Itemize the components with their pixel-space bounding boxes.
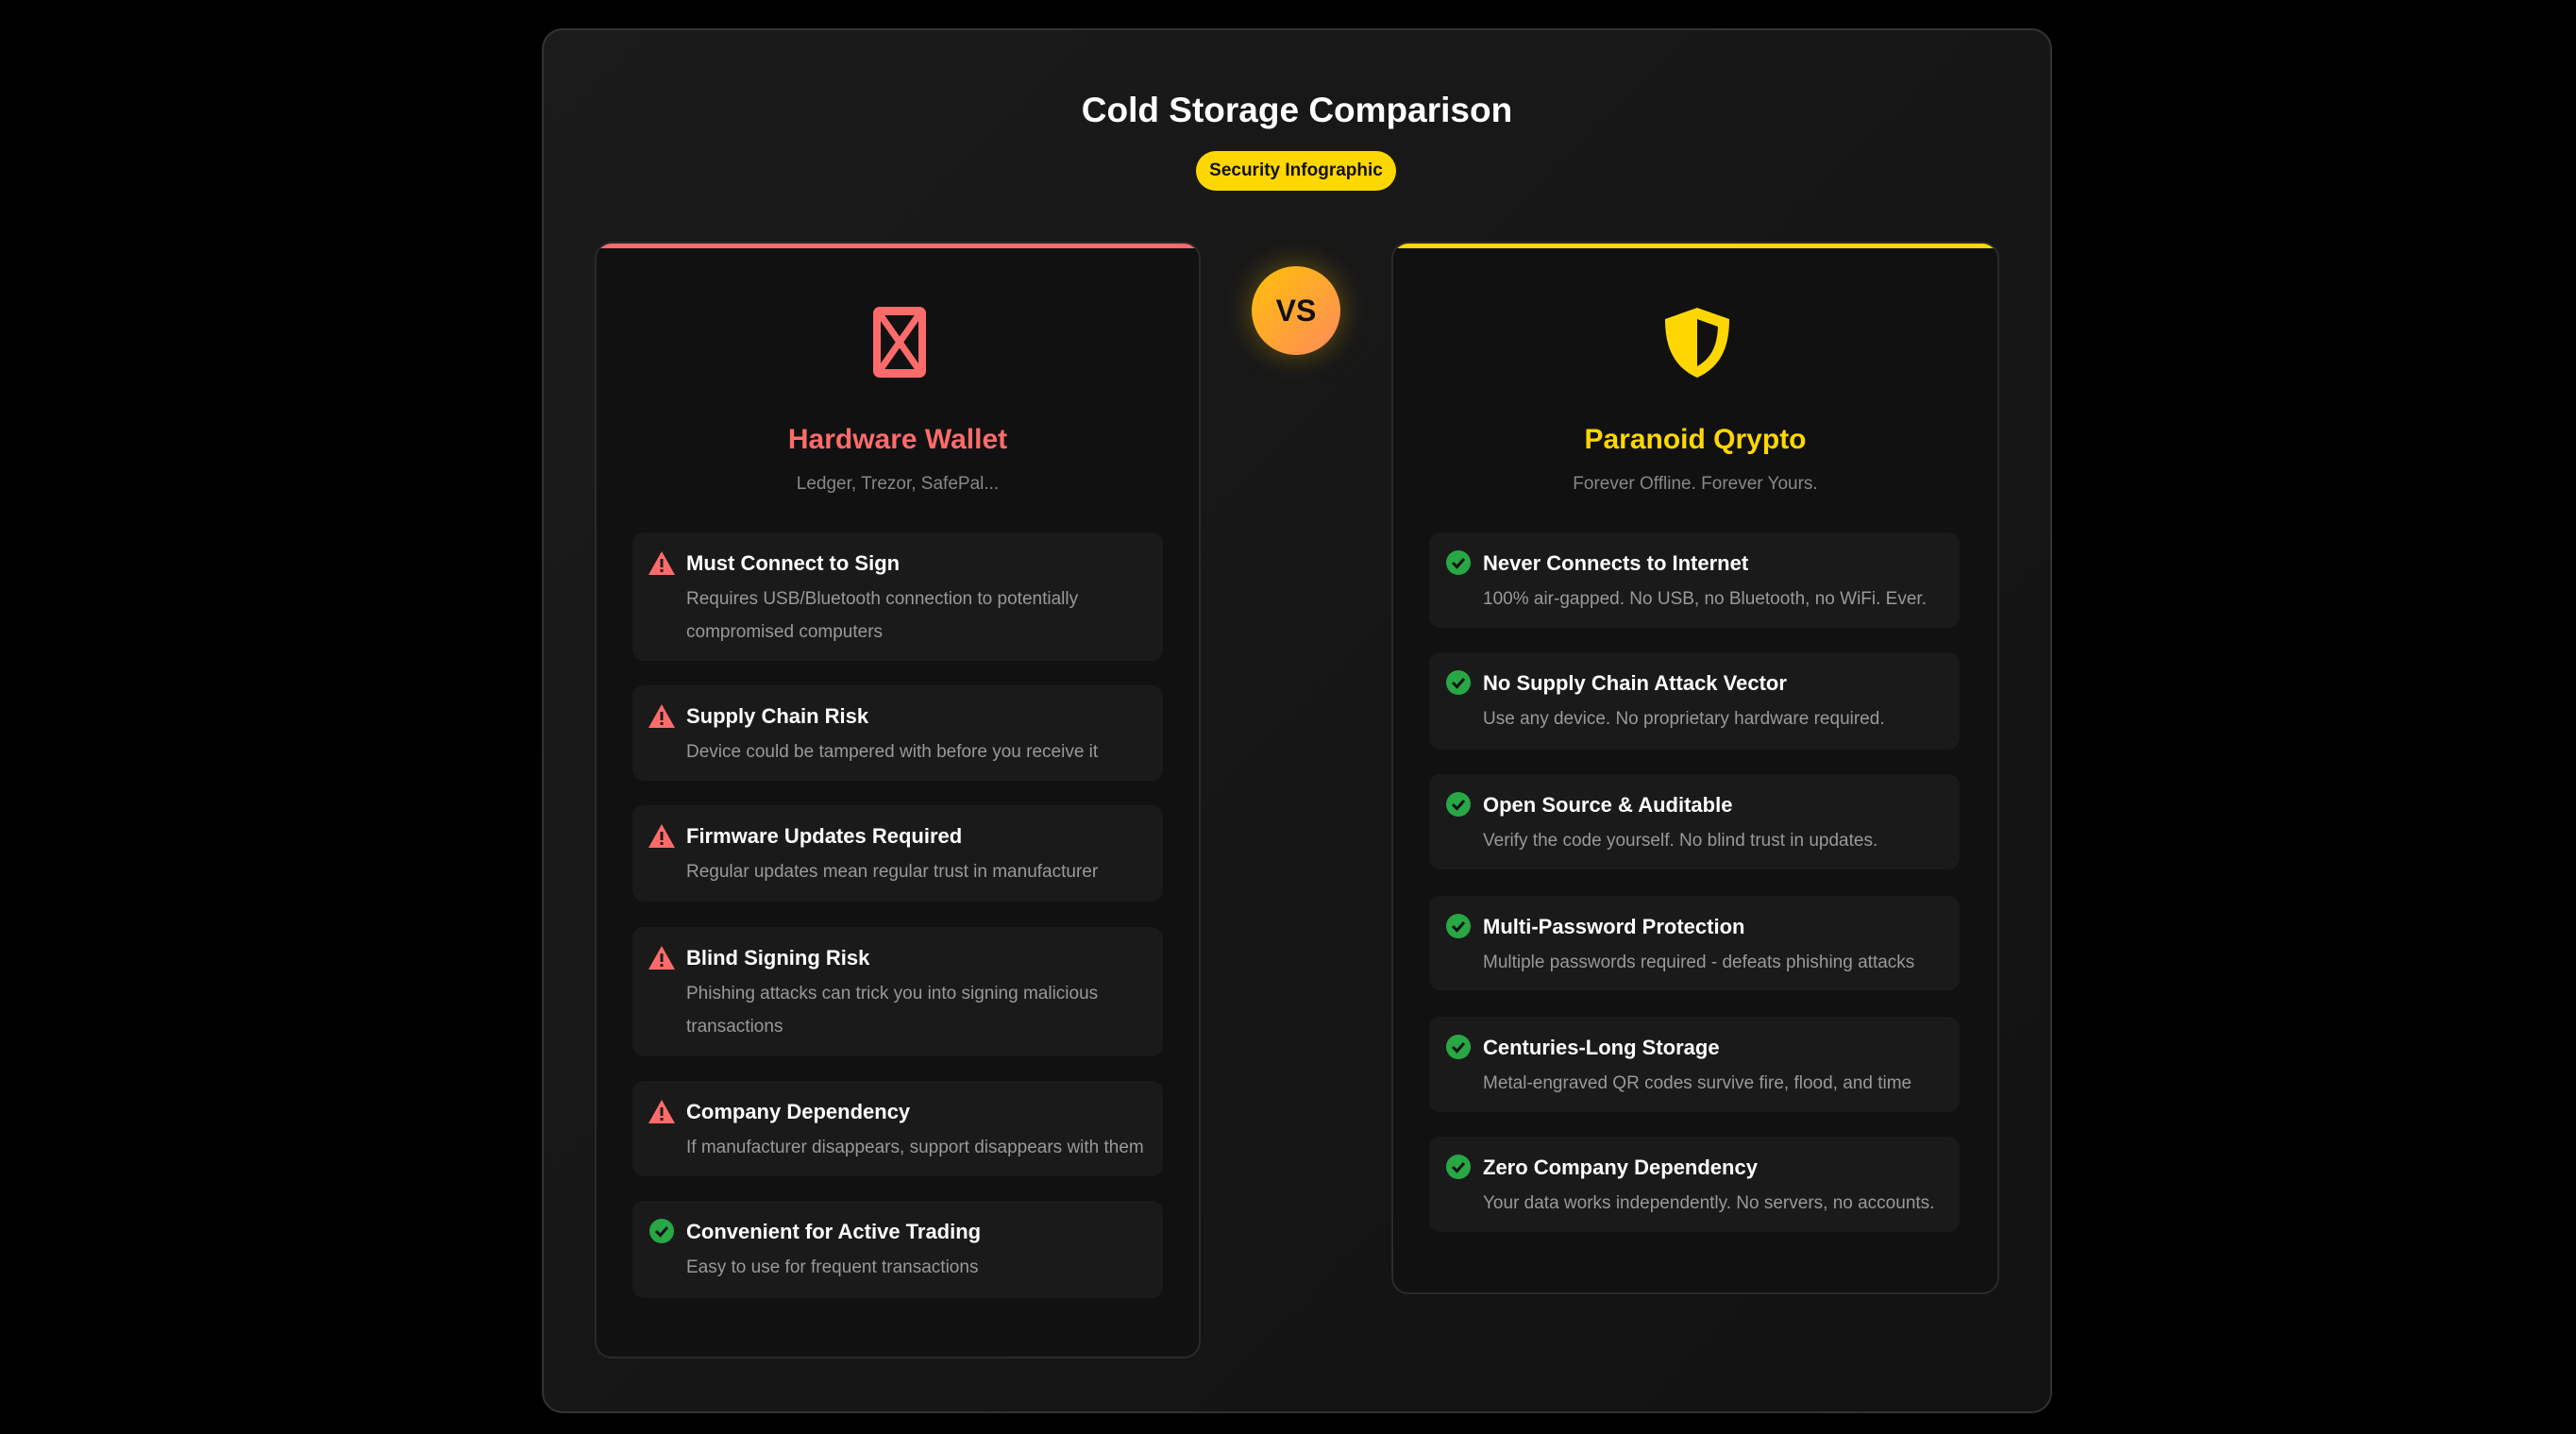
item: zero company dependency (1429, 1137, 1960, 1232)
item: no supply chain (1429, 652, 1960, 750)
panel: paranoid qrypto (1391, 242, 1999, 1294)
item: centuries-long (1429, 1017, 1960, 1112)
icon: hourglass (873, 307, 926, 378)
item: company dependency: If manufacturer disappears, support disappears with them (686, 1138, 1144, 1157)
item: zero company dependency: Zero Company Dependency (1483, 1156, 1758, 1179)
item: open source: Verify the code yourself. No blind trust in updates. (1483, 831, 1877, 851)
item: never connects: Never Connects to Internet (1483, 551, 1748, 575)
VS badge (1252, 266, 1340, 355)
item: blind signing: Phishing attacks can trick you into signing malicious transactions (686, 984, 1098, 1037)
item: company dependency (632, 1081, 1163, 1176)
item: open source: Open Source & Auditable (1483, 793, 1732, 817)
item: blind signing (632, 927, 1163, 1056)
item: must connect: Requires USB/Bluetooth connection to potentially compromised computers (686, 589, 1078, 642)
item: never connects (1429, 532, 1960, 628)
VS badge: VS (1276, 294, 1316, 328)
item: no supply chain: Use any device. No proprietary hardware required. (1483, 709, 1885, 729)
item: centuries-long: Metal-engraved QR codes survive fire, flood, and time (1483, 1073, 1911, 1093)
item: no supply chain: No Supply Chain Attack Vector (1483, 671, 1787, 695)
panel: hardware wallet (595, 242, 1201, 1358)
item: must connect (632, 532, 1163, 661)
title: Cold Storage Comparison (1082, 91, 1512, 129)
item: supply chain: Device could be tampered with before you receive it (686, 742, 1098, 762)
item: must connect: Must Connect to Sign (686, 551, 900, 575)
item: firmware: Firmware Updates Required (686, 824, 962, 848)
subtitle: Forever Offline. Forever Yours. (1573, 474, 1818, 494)
item: company dependency: Company Dependency (686, 1100, 910, 1123)
item: supply chain (632, 685, 1163, 781)
item: open source (1429, 774, 1960, 869)
heading: Paranoid Qrypto (1584, 424, 1807, 455)
badge: Security Infographic (1209, 160, 1383, 180)
item: convenient: Convenient for Active Trading (686, 1220, 981, 1243)
badge (1196, 151, 1396, 191)
item: supply chain: Supply Chain Risk (686, 704, 868, 728)
item: firmware (632, 805, 1163, 902)
item: never connects: 100% air-gapped. No USB, no Bluetooth, no WiFi. Ever. (1483, 589, 1927, 609)
item: zero company dependency: Your data works independently. No servers, no accounts. (1483, 1193, 1934, 1213)
item: convenient: Easy to use for frequent transactions (686, 1257, 978, 1277)
item: firmware: Regular updates mean regular trust in manufacturer (686, 862, 1098, 882)
icon: shield (1665, 308, 1729, 378)
item: multi-password: Multi-Password Protection (1483, 915, 1744, 938)
heading: Hardware Wallet (788, 424, 1007, 455)
item: convenient (632, 1201, 1163, 1298)
subtitle: Ledger, Trezor, SafePal... (797, 474, 999, 494)
item: multi-password: Multiple passwords required - defeats phishing attacks (1483, 953, 1914, 972)
item: blind signing: Blind Signing Risk (686, 946, 869, 970)
item: centuries-long: Centuries-Long Storage (1483, 1036, 1720, 1059)
item: multi-password (1429, 896, 1960, 990)
frame (542, 28, 2052, 1413)
